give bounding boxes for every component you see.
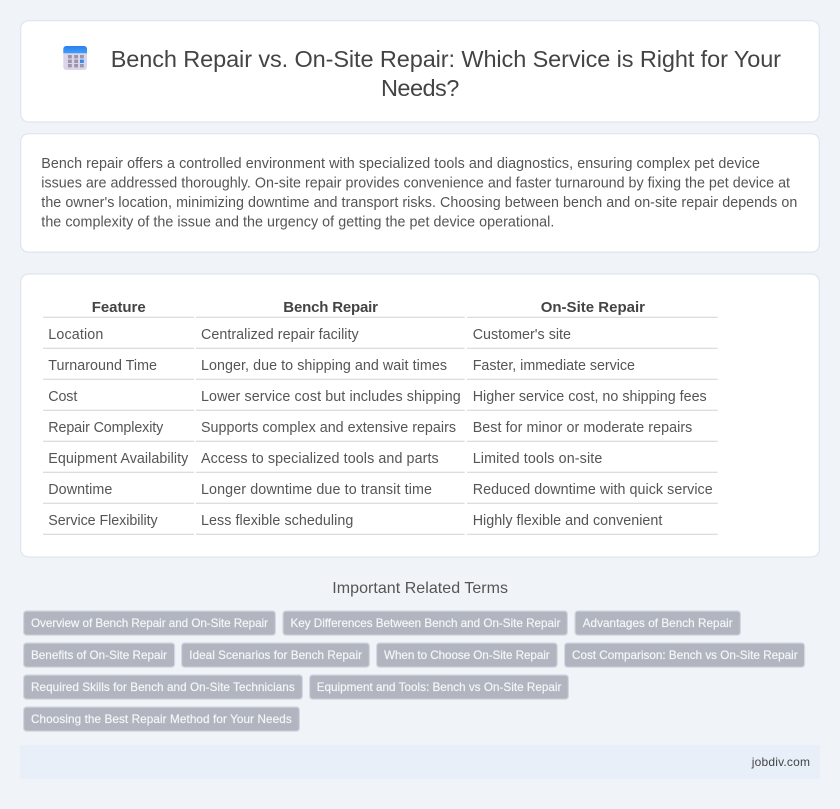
row: cost: Higher service cost, no shipping fees	[473, 389, 707, 405]
row: downtime: Reduced downtime with quick service	[473, 482, 713, 498]
row: location	[48, 327, 571, 343]
row: cost	[48, 389, 707, 405]
table header row: On-Site Repair	[541, 299, 645, 316]
row: equipment availability: Limited tools on-site	[473, 451, 602, 467]
tag: Key Differences Between Bench and On-Site Repair	[290, 617, 561, 630]
tag: Cost Comparison: Bench vs On-Site Repair	[572, 649, 798, 662]
tag: Equipment and Tools: Bench vs On-Site Repair	[317, 681, 561, 694]
tag	[24, 611, 275, 635]
footer	[20, 745, 820, 779]
row: repair complexity: Repair Complexity	[48, 420, 164, 436]
table header row: Feature	[92, 299, 146, 316]
panel: related term tags	[24, 611, 805, 731]
table header row	[92, 299, 645, 316]
row: service flexibility: Less flexible scheduling	[201, 513, 353, 529]
tag: Required Skills for Bench and On-Site Technicians	[31, 681, 295, 694]
row: equipment availability	[48, 451, 602, 467]
tag: Ideal Scenarios for Bench Repair	[189, 649, 362, 662]
tag	[310, 675, 568, 699]
title: Bench Repair vs. On-Site Repair: Which Service is Right for Your	[111, 46, 781, 72]
table header row: Bench Repair	[283, 299, 378, 316]
tag: Overview of Bench Repair and On-Site Repair	[31, 617, 268, 630]
row: equipment availability: Equipment Availability	[48, 451, 189, 467]
tag	[182, 643, 369, 667]
panel: intro paragraph	[21, 134, 819, 252]
row: equipment availability: Access to specialized tools and parts	[201, 451, 439, 467]
row: service flexibility	[48, 513, 662, 529]
row: downtime	[48, 482, 713, 498]
row: cost: Cost	[48, 389, 77, 405]
panel: intro paragraph: the complexity of the issue and the urgency of getting the pet device operational.	[41, 214, 554, 230]
tag	[24, 675, 302, 699]
panel: comparison table	[21, 274, 819, 557]
panel: intro paragraph: the owner's location, minimizing downtime and transport risks. Choosing between bench and on-site repair depends on	[41, 195, 797, 211]
panel: intro paragraph: issues are addressed thoroughly. On-site repair provides convenience and faster turnaround by fixing the pet device at	[41, 175, 790, 191]
row: turnaround time: Longer, due to shipping and wait times	[201, 358, 447, 374]
title: Needs?	[381, 75, 459, 101]
tag	[24, 707, 299, 731]
row: turnaround time: Faster, immediate service	[473, 358, 635, 374]
row: turnaround time: Turnaround Time	[48, 358, 157, 374]
tag: Choosing the Best Repair Method for Your Needs	[31, 713, 292, 726]
tag: Benefits of On-Site Repair	[31, 649, 167, 662]
tag: When to Choose On-Site Repair	[384, 649, 550, 662]
row: downtime: Longer downtime due to transit time	[201, 482, 432, 498]
row: service flexibility: Highly flexible and convenient	[473, 513, 662, 529]
heading: related terms: Important Related Terms	[332, 580, 508, 597]
tag	[24, 643, 175, 667]
icon: calendar	[63, 46, 87, 70]
tag	[575, 611, 740, 635]
row: repair complexity: Supports complex and extensive repairs	[201, 420, 456, 436]
footer: jobdiv.com	[751, 755, 810, 769]
tag: Advantages of Bench Repair	[583, 617, 733, 630]
row: repair complexity: Best for minor or moderate repairs	[473, 420, 692, 436]
row: turnaround time	[48, 358, 635, 374]
row: downtime: Downtime	[48, 482, 112, 498]
panel: intro paragraph: Bench repair offers a controlled environment with specialized tools and diagnostics, ensuring complex pet device	[41, 156, 760, 172]
tag	[377, 643, 557, 667]
row: service flexibility: Service Flexibility	[48, 513, 159, 529]
title	[111, 46, 781, 101]
row: location: Centralized repair facility	[201, 327, 360, 343]
row: cost: Lower service cost but includes shipping	[201, 389, 461, 405]
tag	[565, 643, 805, 667]
row: location: Customer's site	[473, 327, 571, 343]
row: repair complexity	[48, 420, 692, 436]
tag	[283, 611, 567, 635]
row: location: Location	[48, 327, 103, 343]
panel: header	[21, 21, 819, 122]
